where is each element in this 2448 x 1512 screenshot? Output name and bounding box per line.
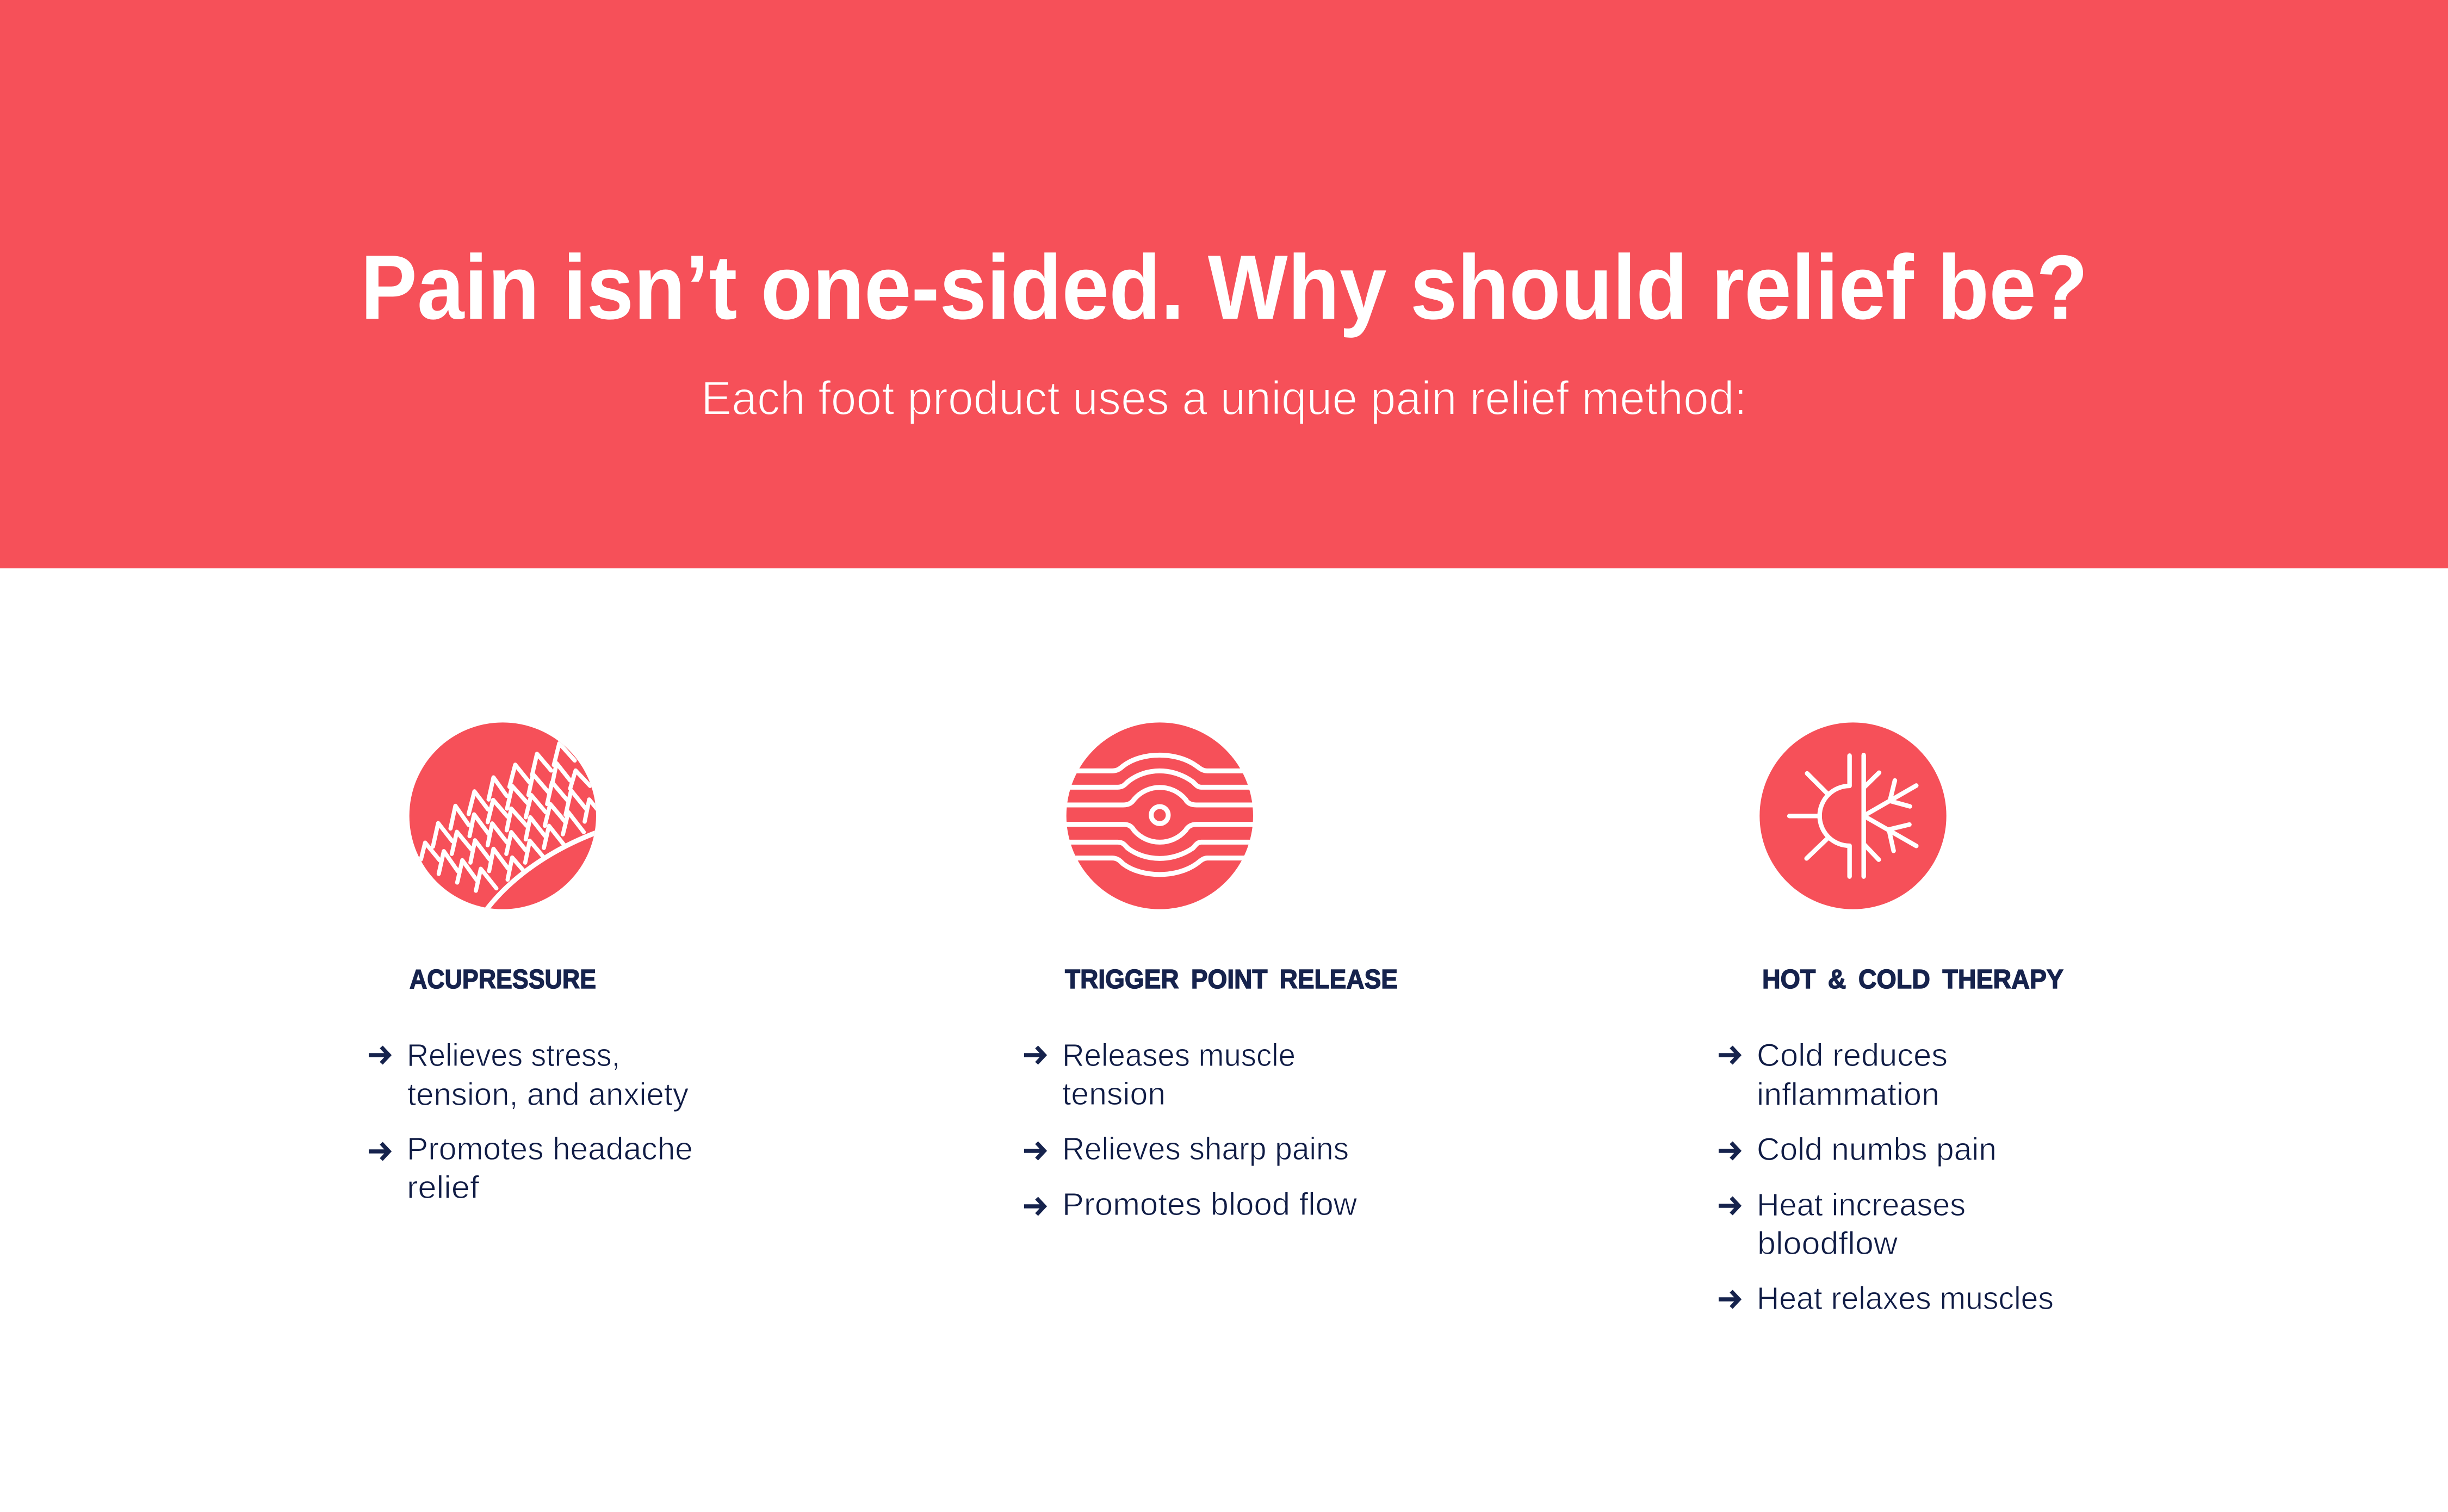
- panel: hot and cold therapy: [1719, 722, 2063, 1316]
- icon: trigger point ripples: [1061, 722, 1260, 909]
- bullet: cold reduces inflammation: Cold reduces: [1757, 1038, 1948, 1073]
- panel: acupressure: [369, 722, 693, 1205]
- icon: sun and snowflake: [1759, 722, 1947, 909]
- heading: hot and cold therapy: HOT & COLD THERAPY: [1762, 965, 2063, 994]
- bullet: relieves stress: Relieves stress,: [407, 1038, 620, 1073]
- arrow: [369, 1143, 389, 1160]
- bullet: heat increases bloodflow: [1757, 1187, 1966, 1261]
- heading: trigger point release: TRIGGER POINT RELEASE: [1065, 965, 1398, 994]
- bullet: relieves stress: tension, and anxiety: [407, 1077, 689, 1112]
- bullet: relieves stress: [407, 1038, 689, 1112]
- title: Pain isn’t one-sided. Why should relief be?: [361, 236, 2088, 338]
- bullet: promotes blood flow: Promotes blood flow: [1062, 1187, 1358, 1222]
- bullet: cold numbs pain: Cold numbs pain: [1757, 1132, 1997, 1167]
- bullet: releases muscle tension: Releases muscle: [1062, 1038, 1296, 1073]
- heading: acupressure: ACUPRESSURE: [410, 965, 596, 994]
- bullet: promotes headache relief: relief: [407, 1170, 480, 1205]
- arrow: [1719, 1143, 1739, 1159]
- bullet: cold reduces inflammation: [1757, 1038, 1948, 1112]
- arrow: [1024, 1047, 1044, 1063]
- bullet: relieves sharp pains: Relieves sharp pains: [1062, 1131, 1349, 1167]
- bullet: heat increases bloodflow: bloodflow: [1757, 1226, 1898, 1261]
- arrow: [1719, 1291, 1739, 1307]
- arrow: [1024, 1198, 1044, 1214]
- bullet: releases muscle tension: [1062, 1038, 1296, 1112]
- subtitle: Each foot product uses a unique pain relief method:: [701, 372, 1747, 425]
- arrow: [1719, 1198, 1739, 1214]
- bullet: heat relaxes muscles: Heat relaxes muscles: [1757, 1281, 2054, 1316]
- arrow: [1024, 1143, 1044, 1159]
- arrow: [1719, 1047, 1739, 1063]
- bullet: cold reduces inflammation: inflammation: [1757, 1077, 1939, 1112]
- bullet: promotes headache relief: Promotes headache: [407, 1131, 693, 1167]
- bullet: heat increases bloodflow: Heat increases: [1757, 1187, 1966, 1223]
- header banner: [0, 0, 2448, 568]
- bullet: promotes headache relief: [407, 1131, 693, 1205]
- icon: acupressure mesh: [410, 722, 605, 909]
- bullet: releases muscle tension: tension: [1062, 1076, 1166, 1112]
- panel: trigger point release: [1024, 722, 1398, 1222]
- arrow: [369, 1047, 389, 1063]
